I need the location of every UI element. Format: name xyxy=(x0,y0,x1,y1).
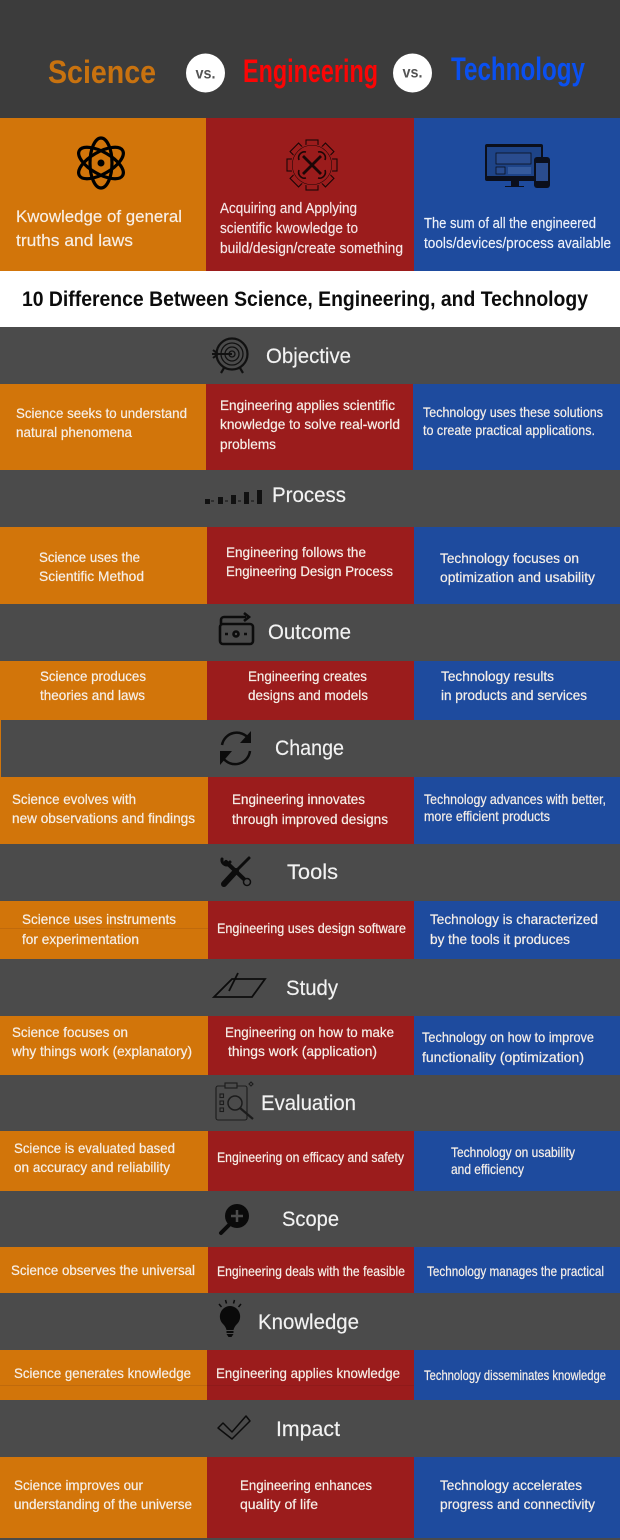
section: Tools: for experimentation xyxy=(22,931,139,947)
icon: wrench and screwdriver xyxy=(222,858,250,886)
text: science definition: Kwowledge of general xyxy=(16,207,182,226)
section: Impact: progress and connectivity xyxy=(440,1496,595,1512)
section: Scope: Science observes the universal xyxy=(11,1262,195,1278)
section: Change: Change xyxy=(275,737,344,760)
section: Scope xyxy=(0,1204,620,1293)
icon: check mark xyxy=(218,1416,250,1439)
heading band: 10 Difference Between Science, Engineering, and Technology xyxy=(22,288,588,311)
section: Process: optimization and usability xyxy=(440,569,595,585)
section: Objective xyxy=(0,338,620,470)
section: Change: more efficient products xyxy=(424,808,550,824)
icon: devices xyxy=(485,144,550,188)
section: Evaluation: Technology on usability xyxy=(451,1144,575,1160)
icon: refresh arrows xyxy=(220,731,251,765)
section: Impact: Science improves our xyxy=(14,1477,143,1493)
section: Objective: problems xyxy=(220,436,276,452)
section: Outcome: Engineering creates xyxy=(248,668,367,684)
section: Process: Scientific Method xyxy=(39,568,144,584)
section: Outcome xyxy=(0,613,620,720)
title: Engineering: Engineering xyxy=(243,53,378,89)
section: Change: through improved designs xyxy=(232,811,388,827)
text: engineering definition: scientific kwowledge to xyxy=(220,220,358,237)
section: Evaluation: on accuracy and reliability xyxy=(14,1159,170,1175)
section: Knowledge: Science generates knowledge xyxy=(14,1365,191,1381)
section: Study: Technology on how to improve xyxy=(422,1029,594,1045)
section: Impact: Impact xyxy=(276,1418,340,1441)
section: Impact: Engineering enhances xyxy=(240,1477,372,1493)
section: Scope: Scope xyxy=(282,1208,339,1231)
section: Impact: understanding of the universe xyxy=(14,1496,192,1512)
badge: vs. 2: vs. xyxy=(402,64,422,82)
section: Impact: Technology accelerates xyxy=(440,1477,582,1493)
section: Tools: Tools xyxy=(287,861,338,884)
section: Study: Engineering on how to make xyxy=(225,1024,394,1040)
text: technology definition xyxy=(424,215,611,252)
section: Outcome: Outcome xyxy=(268,621,351,644)
icon: clipboard magnifier xyxy=(216,1082,253,1120)
text: technology definition: The sum of all the engineered xyxy=(424,215,596,232)
section: Process: Science uses the xyxy=(39,549,140,565)
heading band xyxy=(0,271,620,327)
section: Tools: by the tools it produces xyxy=(430,931,570,947)
badge: vs. 2 xyxy=(393,54,432,92)
icon: gear and tools xyxy=(287,140,337,190)
section: Evaluation: Engineering on efficacy and safety xyxy=(217,1149,404,1165)
icon: atom xyxy=(74,138,128,188)
section: Objective: knowledge to solve real-world xyxy=(220,416,400,432)
icon: process bars xyxy=(205,490,262,504)
section: Evaluation xyxy=(0,1082,620,1191)
section: Tools xyxy=(0,858,620,959)
title: Science: Science xyxy=(48,54,156,90)
section: Objective: Technology uses these solutions xyxy=(423,404,603,420)
section: Study: functionality (optimization) xyxy=(422,1049,584,1065)
section: Objective: natural phenomena xyxy=(16,424,132,440)
section: Objective: Science seeks to understand xyxy=(16,405,187,421)
section: Outcome: Science produces xyxy=(40,668,146,684)
text: engineering definition xyxy=(220,200,403,257)
section: Objective: to create practical applications. xyxy=(423,422,595,438)
section: Study: why things work (explanatory) xyxy=(11,1043,192,1059)
section: Study: Science focuses on xyxy=(12,1024,128,1040)
section: Scope: Engineering deals with the feasible xyxy=(217,1263,405,1279)
icon: money transfer xyxy=(220,613,253,644)
header band xyxy=(0,0,620,118)
section: Knowledge: Engineering applies knowledge xyxy=(216,1365,400,1381)
badge: vs. xyxy=(186,54,225,92)
section: Process: Process xyxy=(272,484,346,507)
section: Evaluation: and efficiency xyxy=(451,1161,524,1177)
section: Knowledge xyxy=(0,1300,620,1400)
section: Impact: quality of life xyxy=(240,1496,318,1512)
section: Change: new observations and findings xyxy=(12,810,195,826)
section: Tools: Science uses instruments xyxy=(22,911,176,927)
section: Change: Engineering innovates xyxy=(232,791,365,807)
section: Objective: Engineering applies scientific xyxy=(220,397,395,413)
panel: definitions xyxy=(0,118,620,271)
section: Process: Engineering follows the xyxy=(226,544,366,560)
section: Process: Technology focuses on xyxy=(440,550,579,566)
section: Process xyxy=(0,484,620,604)
section: Process: Engineering Design Process xyxy=(226,563,393,579)
section: Outcome: Technology results xyxy=(441,668,554,684)
section: Change: Science evolves with xyxy=(12,791,136,807)
section: Objective: Objective xyxy=(266,345,351,368)
badge: vs.: vs. xyxy=(196,66,216,82)
section: Tools: Technology is characterized xyxy=(430,911,598,927)
icon: target xyxy=(212,338,248,373)
section: Study xyxy=(0,973,620,1075)
section: Knowledge: Knowledge xyxy=(258,1311,359,1334)
section: Impact xyxy=(0,1416,620,1538)
text: engineering definition: build/design/create something xyxy=(220,240,403,257)
section: Tools: Engineering uses design software xyxy=(217,920,406,936)
section: Outcome: theories and laws xyxy=(40,687,145,703)
text: science definition xyxy=(16,207,182,250)
section: Change xyxy=(0,720,620,844)
section: Study: Study xyxy=(286,977,338,1000)
section: Evaluation: Science is evaluated based xyxy=(14,1140,175,1156)
text: engineering definition: Acquiring and Applying xyxy=(220,200,357,217)
icon: light bulb xyxy=(219,1300,241,1337)
section: Study: things work (application) xyxy=(228,1043,377,1059)
section: Outcome: in products and services xyxy=(441,687,587,703)
section: Outcome: designs and models xyxy=(248,687,368,703)
text: science definition: truths and laws xyxy=(16,231,133,250)
section: Evaluation: Evaluation xyxy=(261,1092,356,1115)
icon: plane sketch xyxy=(214,973,265,997)
icon: magnifier plus xyxy=(221,1204,249,1233)
